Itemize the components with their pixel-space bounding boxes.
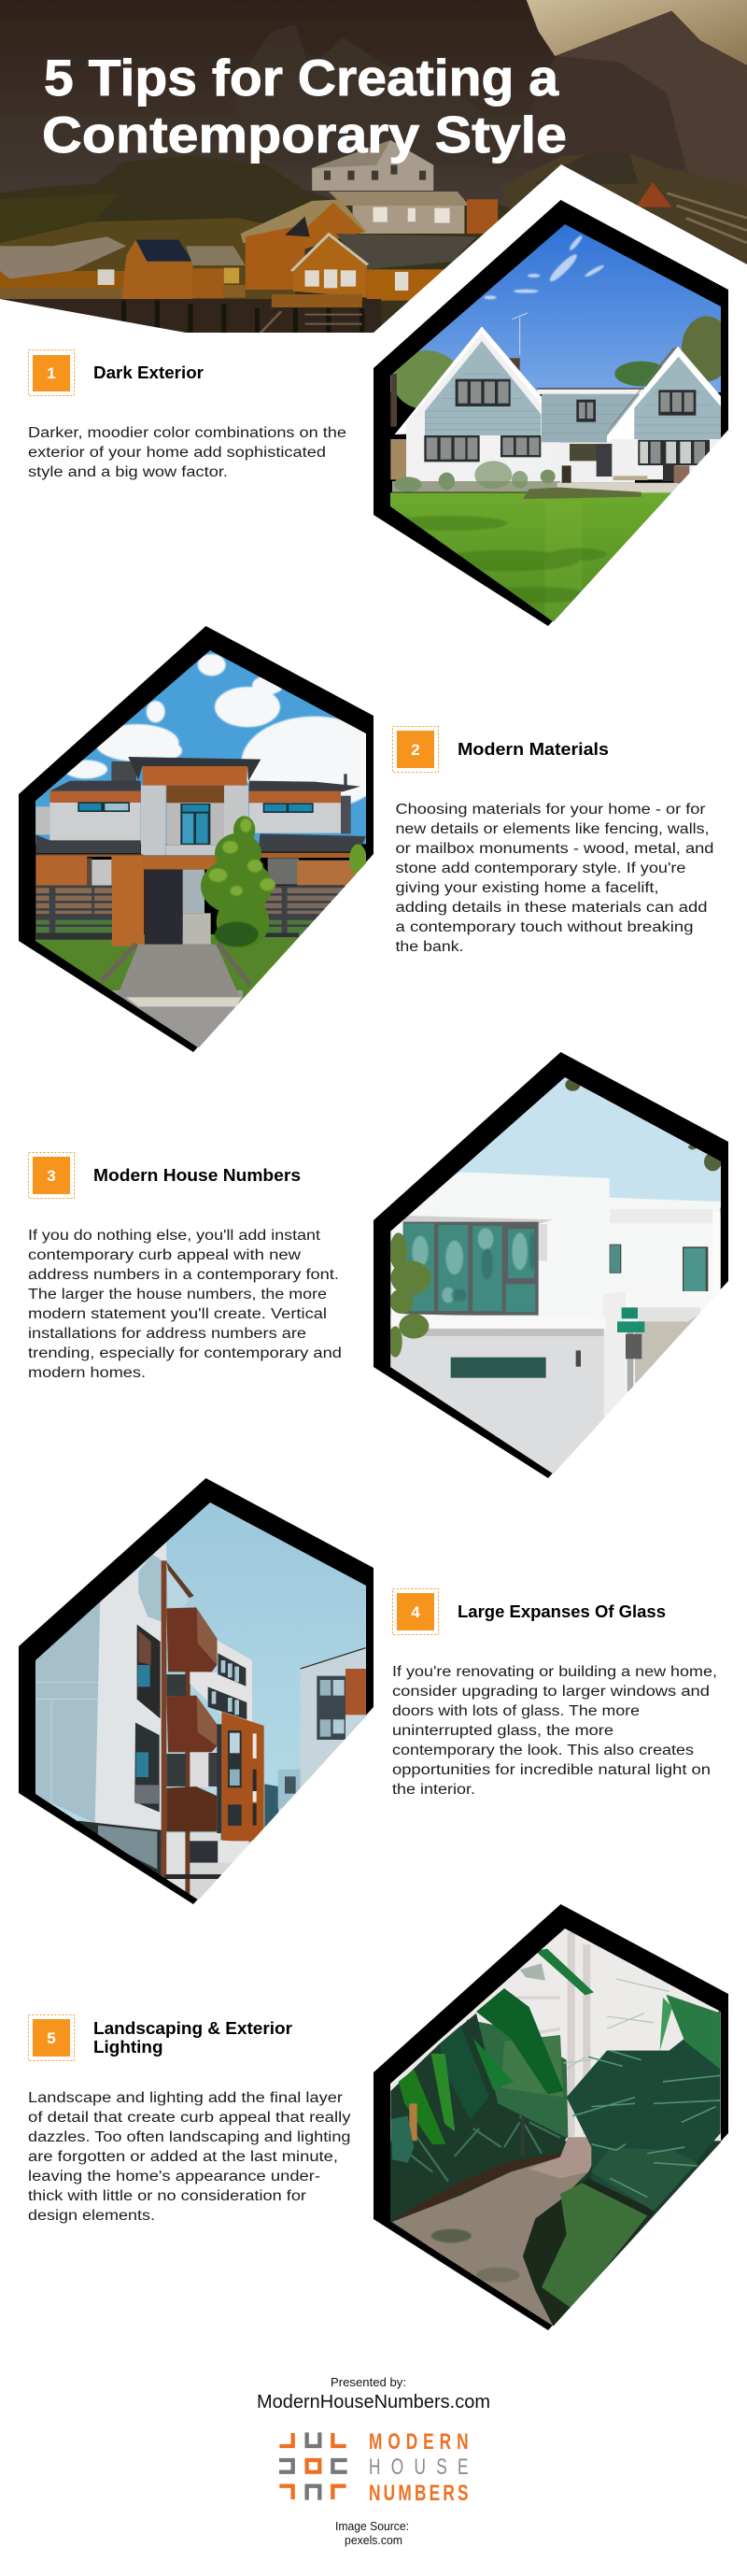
- badge 1: 1: [47, 364, 56, 382]
- text block 3: installations for address numbers are: [28, 1326, 306, 1342]
- text block 3: modern homes.: [28, 1365, 146, 1381]
- text block 5: [28, 2090, 351, 2224]
- image source credit: [335, 2520, 409, 2547]
- badge 5: 5: [47, 2029, 56, 2047]
- hexagon photo 3: white contemporary building: [374, 1052, 728, 1488]
- panel: tip 3 modern house numbers: [28, 1153, 342, 1381]
- text block 5: thick with little or no consideration for: [28, 2188, 306, 2204]
- white diagonal cut at header bottom left: [0, 299, 186, 333]
- text block 4: uninterrupted glass, the more: [392, 1723, 613, 1739]
- panel: tip 5 landscaping and exterior lighting: [28, 2014, 351, 2224]
- heading 4: Large Expanses Of Glass: [458, 1602, 666, 1621]
- text block 1: style and a big wow factor.: [28, 464, 228, 480]
- panel: tip 2 modern materials: [392, 727, 713, 955]
- logo wordmark: HOUSE: [369, 2455, 469, 2480]
- footer: presented by: [257, 2375, 490, 2412]
- logo: Modern House Numbers: [279, 2429, 469, 2506]
- text block 3: modern statement you'll create. Vertical: [28, 1306, 327, 1322]
- text block 3: The larger the house numbers, the more: [28, 1287, 327, 1302]
- white hexagon backing behind first photo: [374, 164, 747, 654]
- text block 2: the bank.: [396, 939, 463, 955]
- text block 3: If you do nothing else, you'll add instant: [28, 1228, 321, 1244]
- text block 3: [28, 1228, 342, 1381]
- text block 5: of detail that create curb appeal that really: [28, 2110, 351, 2126]
- badge 1: [28, 349, 75, 396]
- heading 5: [93, 2019, 292, 2057]
- text block 1: [28, 425, 346, 480]
- heading 5: Landscaping & Exterior: [93, 2019, 292, 2038]
- text block 3: contemporary curb appeal with new: [28, 1247, 302, 1263]
- text block 2: a contemporary touch without breaking: [396, 919, 693, 935]
- badge 2: 2: [411, 741, 420, 759]
- heading 3: Modern House Numbers: [93, 1166, 301, 1185]
- footer: presented by: Presented by:: [331, 2375, 406, 2389]
- badge 5: [28, 2014, 75, 2061]
- text block 2: giving your existing home a facelift,: [396, 880, 659, 896]
- heading 2: Modern Materials: [458, 740, 609, 759]
- hexagon photo 4: apartment with rust balconies: [19, 1478, 374, 1908]
- text block 5: are forgotten or added at the last minute,: [28, 2149, 338, 2165]
- hexagon photo 1: house with gables: [374, 200, 731, 627]
- text block 4: contemporary the look. This also creates: [392, 1743, 694, 1758]
- text block 2: Choosing materials for your home - or for: [396, 802, 706, 818]
- text block 5: design elements.: [28, 2208, 155, 2224]
- logo wordmark: [369, 2429, 469, 2506]
- header photo: lakeside village: [0, 0, 747, 336]
- badge 3: 3: [47, 1167, 56, 1185]
- text block 4: doors with lots of glass. The more: [392, 1703, 640, 1719]
- badge 2: [392, 727, 439, 772]
- title: 5 Tips for Creating a: [44, 49, 558, 107]
- text block 2: or mailbox monuments - wood, metal, and: [396, 841, 713, 857]
- footer: presented by: ModernHouseNumbers.com: [257, 2392, 490, 2412]
- heading 1: Dark Exterior: [93, 363, 204, 382]
- text block 2: stone add contemporary style. If you're: [396, 861, 685, 876]
- text block 5: dazzles. Too often landscaping and lighting: [28, 2129, 351, 2145]
- badge 4: 4: [411, 1603, 420, 1621]
- text block 4: the interior.: [392, 1782, 475, 1798]
- panel: tip 1 dark exterior: [28, 349, 346, 480]
- hexagon photo 2: modern house with wood and stone: [19, 626, 388, 1062]
- logo icon grid: [279, 2432, 347, 2500]
- badge 3: [28, 1153, 75, 1198]
- text block 5: Landscape and lighting add the final layer: [28, 2090, 343, 2106]
- text block 1: exterior of your home add sophisticated: [28, 445, 326, 461]
- title: Contemporary Style: [42, 106, 567, 164]
- text block 4: consider upgrading to larger windows and: [392, 1684, 710, 1700]
- heading 5: Lighting: [93, 2038, 162, 2057]
- logo wordmark: MODERN: [369, 2429, 469, 2455]
- panel: tip 4 large expanses of glass: [392, 1588, 717, 1798]
- text block 2: adding details in these materials can add: [396, 900, 708, 916]
- badge 4: [392, 1588, 439, 1635]
- logo wordmark: NUMBERS: [369, 2481, 469, 2506]
- hexagon photo 5: greenhouse garden path: [374, 1904, 728, 2337]
- text block 4: opportunities for incredible natural light on: [392, 1762, 711, 1778]
- text block 5: leaving the home's appearance under-: [28, 2169, 320, 2185]
- text block 3: address numbers in a contemporary font.: [28, 1267, 339, 1283]
- text block 4: [392, 1664, 717, 1798]
- text block 4: If you're renovating or building a new home,: [392, 1664, 717, 1680]
- text block 2: new details or elements like fencing, walls,: [396, 821, 710, 837]
- text block 3: trending, especially for contemporary and: [28, 1345, 342, 1361]
- text block 2: [396, 802, 713, 955]
- image source credit: Image Source:: [335, 2520, 409, 2533]
- text block 1: Darker, moodier color combinations on the: [28, 425, 346, 441]
- title: [42, 49, 567, 164]
- image source credit: pexels.com: [345, 2534, 402, 2547]
